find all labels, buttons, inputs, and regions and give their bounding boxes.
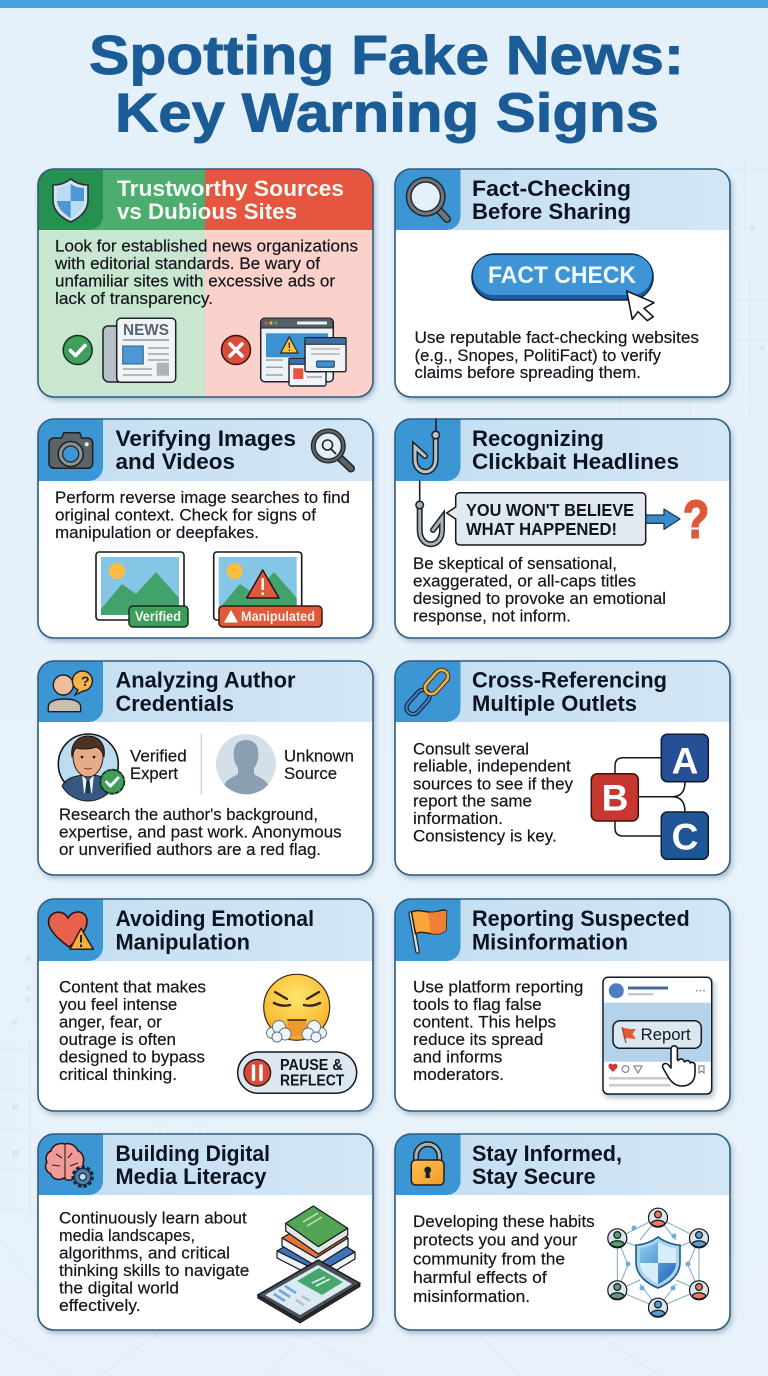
speech bubble headline: YOU WON'T BELIEVE xyxy=(466,500,634,520)
body text: Consistency is key. xyxy=(413,828,557,846)
image: verified xyxy=(96,552,188,627)
heading: Trustworthy Sources xyxy=(117,176,344,201)
heading xyxy=(472,1141,622,1189)
title: Spotting Fake News: xyxy=(89,25,684,86)
body text: report the same xyxy=(413,793,532,811)
body text: Content that makes xyxy=(59,979,206,997)
badge: verified: Verified xyxy=(135,609,181,624)
icon: cursor xyxy=(627,291,654,321)
unknown source avatar xyxy=(216,734,276,794)
icon: red cross xyxy=(222,336,250,364)
heading: and Videos xyxy=(116,449,235,474)
heading: Before Sharing xyxy=(472,199,631,224)
body text: Use platform reporting xyxy=(413,979,583,997)
icon: hook with line xyxy=(416,481,442,544)
body text: Research the author's background, xyxy=(59,806,318,824)
icon: newspaper xyxy=(103,318,176,382)
icon: fish hook xyxy=(415,419,440,472)
body text: Look for established news organizations xyxy=(55,238,358,256)
heading: Recognizing xyxy=(472,426,604,451)
heading: Multiple Outlets xyxy=(472,691,637,716)
body text: information. xyxy=(413,810,503,828)
heading: Stay Informed, xyxy=(472,1141,622,1166)
icon: question mark: ? xyxy=(683,490,709,550)
heading xyxy=(472,426,679,474)
panel: cross-referencing multiple outlets xyxy=(395,661,730,875)
report button: Report xyxy=(641,1026,691,1044)
heading xyxy=(116,426,296,474)
panel: reporting suspected misinformation xyxy=(395,899,730,1111)
heading xyxy=(472,906,690,954)
verified expert label xyxy=(130,748,187,783)
heading: Stay Secure xyxy=(472,1164,596,1189)
speech bubble headline: WHAT HAPPENED! xyxy=(466,519,617,539)
icon: padlock xyxy=(411,1144,444,1185)
panel: recognizing clickbait headlines xyxy=(395,419,730,638)
body text: original context. Check for signs of xyxy=(55,507,316,525)
body text: the digital world xyxy=(59,1280,179,1298)
body text: algorithms, and critical xyxy=(59,1245,230,1263)
icon: camera xyxy=(49,433,93,468)
body text xyxy=(59,1210,249,1315)
body text: and informs xyxy=(413,1049,502,1067)
icon: large shield xyxy=(636,1237,680,1288)
heading: Building Digital xyxy=(116,1141,270,1166)
body text: harmful effects of xyxy=(413,1269,547,1287)
fact check button: FACT CHECK xyxy=(488,262,637,289)
icon: shield xyxy=(53,179,88,222)
heading: Clickbait Headlines xyxy=(472,449,679,474)
body text xyxy=(59,806,342,859)
panel: building digital media literacy xyxy=(38,1134,373,1330)
body text: (e.g., Snopes, PolitiFact) to verify xyxy=(414,347,662,365)
body text: unfamiliar sites with excessive ads or xyxy=(55,272,336,290)
panel: avoiding emotional manipulation xyxy=(38,899,373,1111)
body text: designed to provoke an emotional xyxy=(413,590,666,608)
body text: manipulation or deepfakes. xyxy=(55,524,259,542)
body text xyxy=(55,489,350,542)
body text: critical thinking. xyxy=(59,1066,177,1084)
panel: analyzing author credentials xyxy=(38,661,373,875)
body text: claims before spreading them. xyxy=(414,364,641,382)
badge: manipulated: Manipulated xyxy=(241,609,315,624)
image: manipulated xyxy=(214,552,322,627)
body text: exaggerated, or all-caps titles xyxy=(413,573,636,591)
body text: or unverified authors are a red flag. xyxy=(59,841,321,859)
icon: pointing hand xyxy=(663,1046,695,1086)
heading: Manipulation xyxy=(116,929,250,954)
heading xyxy=(117,176,344,224)
body text: anger, fear, or xyxy=(59,1014,162,1032)
heading: Analyzing Author xyxy=(116,668,296,693)
speech bubble headline xyxy=(447,493,646,545)
heading: Cross-Referencing xyxy=(472,668,667,693)
icon: person with question xyxy=(48,671,92,712)
body text: you feel intense xyxy=(59,996,177,1014)
verified expert label: Expert xyxy=(130,765,178,783)
body text: Continuously learn about xyxy=(59,1210,247,1228)
body text: outrage is often xyxy=(59,1031,176,1049)
body text: Developing these habits xyxy=(413,1213,595,1231)
icon: chain link xyxy=(404,667,451,717)
icon: brain with gear xyxy=(46,1143,92,1186)
heading xyxy=(472,176,631,224)
body text xyxy=(413,979,583,1084)
body text: effectively. xyxy=(59,1297,141,1315)
panel: verifying images and videos xyxy=(38,419,373,638)
heading xyxy=(116,906,314,954)
body text xyxy=(413,555,666,626)
body text: tools to flag false xyxy=(413,996,542,1014)
pause and reflect pill xyxy=(238,1052,357,1093)
heading: Fact-Checking xyxy=(472,176,631,201)
icon: angry emoji xyxy=(264,974,330,1042)
body text: moderators. xyxy=(413,1066,504,1084)
unknown source label: Source xyxy=(284,765,337,783)
box B: B xyxy=(602,778,628,818)
body text: sources to see if they xyxy=(413,775,574,793)
body text xyxy=(414,329,699,382)
body text: content. This helps xyxy=(413,1014,556,1032)
icon: heart with warning xyxy=(48,912,93,949)
body text: with editorial standards. Be wary of xyxy=(54,255,320,273)
icon: green check xyxy=(63,336,92,364)
icon: person with question: ? xyxy=(81,673,90,689)
icon: search magnifier xyxy=(313,431,351,468)
body text: media landscapes, xyxy=(59,1227,195,1245)
body text: Perform reverse image searches to find xyxy=(55,489,350,507)
body text: thinking skills to navigate xyxy=(59,1262,249,1280)
heading: Verifying Images xyxy=(116,426,296,451)
body text: protects you and your xyxy=(413,1232,578,1250)
unknown source label: Unknown xyxy=(284,748,354,766)
arrow xyxy=(646,509,680,529)
icon: tablet xyxy=(258,1260,360,1323)
body text: lack of transparency. xyxy=(55,290,213,308)
icon: magnifying glass xyxy=(409,180,447,219)
body text: expertise, and past work. Anonymous xyxy=(59,824,342,842)
body text xyxy=(59,979,206,1084)
network with shield xyxy=(608,1208,708,1317)
title xyxy=(89,25,684,144)
box C: C xyxy=(672,816,698,858)
source diagram A B C xyxy=(591,734,708,859)
body text: response, not inform. xyxy=(413,608,571,626)
box A: A xyxy=(672,740,698,782)
body text: designed to bypass xyxy=(59,1049,205,1067)
heading: vs Dubious Sites xyxy=(117,199,297,224)
heading xyxy=(472,668,667,716)
pause and reflect pill: REFLECT xyxy=(280,1073,345,1090)
panel: trustworthy sources vs dubious sites xyxy=(38,169,373,397)
social post mockup xyxy=(603,977,712,1094)
body text: reduce its spread xyxy=(413,1031,543,1049)
body text: Use reputable fact-checking websites xyxy=(414,329,699,347)
panel: fact-checking before sharing xyxy=(395,169,730,397)
panel: stay informed, stay secure xyxy=(395,1134,730,1330)
verified expert avatar xyxy=(58,734,124,801)
icon: dubious browser windows xyxy=(261,318,346,386)
body text: misinformation. xyxy=(413,1288,530,1306)
body text xyxy=(413,740,574,846)
verified expert label: Verified xyxy=(130,748,187,766)
body text: Be skeptical of sensational, xyxy=(413,555,617,573)
title: Key Warning Signs xyxy=(115,82,659,144)
heading: Misinformation xyxy=(472,929,628,954)
heading: Media Literacy xyxy=(116,1164,267,1189)
body text xyxy=(413,1213,595,1306)
heading: Reporting Suspected xyxy=(472,906,690,931)
body text: community from the xyxy=(413,1250,565,1268)
heading: Credentials xyxy=(116,691,234,716)
body text: Consult several xyxy=(413,740,529,758)
fact check button xyxy=(472,254,653,300)
icon: flag xyxy=(411,910,446,952)
heading xyxy=(116,1141,270,1189)
icon: stacked books xyxy=(277,1206,355,1280)
heading xyxy=(116,668,296,716)
pause and reflect pill: PAUSE & xyxy=(280,1057,343,1074)
heading: Avoiding Emotional xyxy=(116,906,314,931)
icon: newspaper: NEWS xyxy=(123,322,169,339)
people nodes xyxy=(608,1208,708,1317)
body text: reliable, independent xyxy=(413,758,571,776)
unknown source label xyxy=(284,748,354,783)
body text xyxy=(54,238,358,308)
badge: verified check xyxy=(100,770,124,794)
